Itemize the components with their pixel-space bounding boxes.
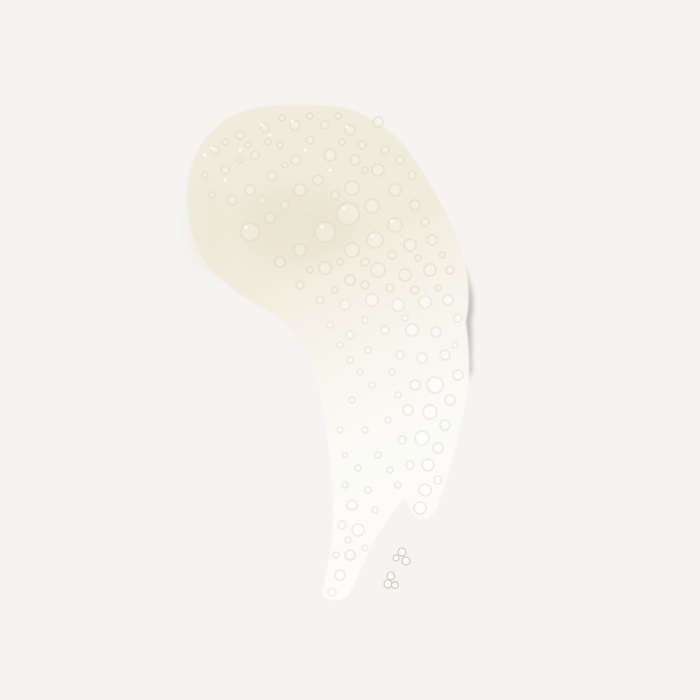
foam shadow (458, 262, 473, 380)
droplets (384, 548, 410, 588)
warm tone centre (233, 187, 357, 263)
bubbles: upper foam (202, 113, 454, 304)
bubbles: lower foam (327, 294, 463, 596)
smooth left edge tone (192, 180, 232, 270)
bubble highlights (204, 120, 394, 238)
foam body (187, 104, 469, 600)
